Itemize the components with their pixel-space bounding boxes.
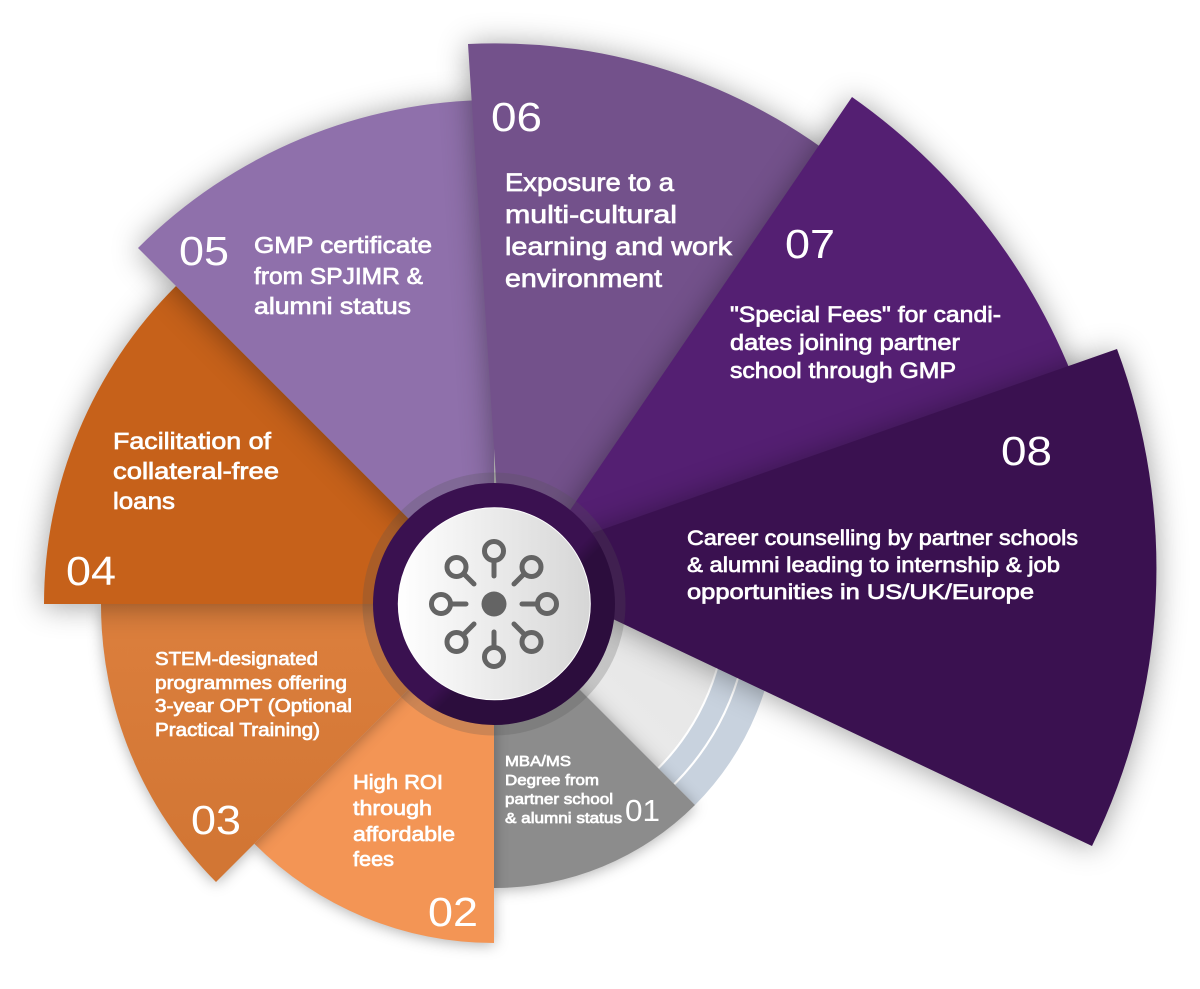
label 02: fees <box>353 849 394 871</box>
wedge 08 <box>501 349 1156 846</box>
label 03 <box>155 649 352 843</box>
wedge 01 <box>494 604 695 888</box>
label 05: from SPJIMR & <box>254 263 423 289</box>
label 01: Degree from <box>505 772 599 789</box>
wedge 02 <box>254 604 494 943</box>
label 02: through <box>353 798 432 820</box>
light segment behind 01 <box>494 604 778 805</box>
label 01: partner school <box>505 791 613 808</box>
hub disc <box>398 508 590 700</box>
wedge 03 <box>101 604 494 882</box>
label 05: alumni status <box>254 293 411 319</box>
label 05: 05 <box>179 228 229 274</box>
label 06: environment <box>505 265 662 293</box>
label 07: school through GMP <box>730 358 956 383</box>
label 08: & alumni leading to internship & job <box>687 554 1060 577</box>
label 04: loans <box>113 488 175 514</box>
label 08: 08 <box>1001 428 1052 474</box>
label 01: MBA/MS <box>505 753 571 770</box>
label 03: Practical Training) <box>155 720 320 740</box>
label 08 <box>687 428 1078 604</box>
label 03: 03 <box>191 797 241 843</box>
label 06 <box>491 94 733 293</box>
wedge 04 <box>44 286 494 604</box>
hub <box>362 472 626 736</box>
label 06: multi-cultural <box>505 201 677 229</box>
label 02: High ROI <box>353 772 443 794</box>
label 05: GMP certificate <box>254 232 432 258</box>
label 01 <box>505 753 660 828</box>
label 04: 04 <box>66 548 116 594</box>
label 04: collateral-free <box>113 458 279 484</box>
label 02: affordable <box>353 824 455 846</box>
label 01: & alumni status <box>505 810 622 827</box>
wedge 06 <box>468 43 864 604</box>
label 07: dates joining partner <box>730 330 960 355</box>
label 07: "Special Fees" for candi- <box>730 302 1001 327</box>
label 02 <box>353 772 478 935</box>
label 02: 02 <box>428 889 478 935</box>
label 05 <box>179 228 432 319</box>
label 07 <box>730 221 1001 383</box>
wedge 05 <box>138 100 494 604</box>
label 06: 06 <box>491 94 542 140</box>
label 06: learning and work <box>505 233 733 261</box>
label 04: Facilitation of <box>113 428 272 454</box>
label 04 <box>66 428 279 594</box>
wedge 07 <box>506 97 1089 604</box>
label 01: 01 <box>625 793 660 828</box>
label 07: 07 <box>785 221 835 267</box>
label 08: Career counselling by partner schools <box>687 527 1078 550</box>
label 03: STEM-designated <box>155 649 318 669</box>
label 03: 3-year OPT (Optional <box>155 696 352 716</box>
label 08: opportunities in US/UK/Europe <box>687 581 1034 604</box>
label 03: programmes offering <box>155 673 347 693</box>
label 06: Exposure to a <box>505 169 674 197</box>
icon: network nodes <box>432 542 556 666</box>
